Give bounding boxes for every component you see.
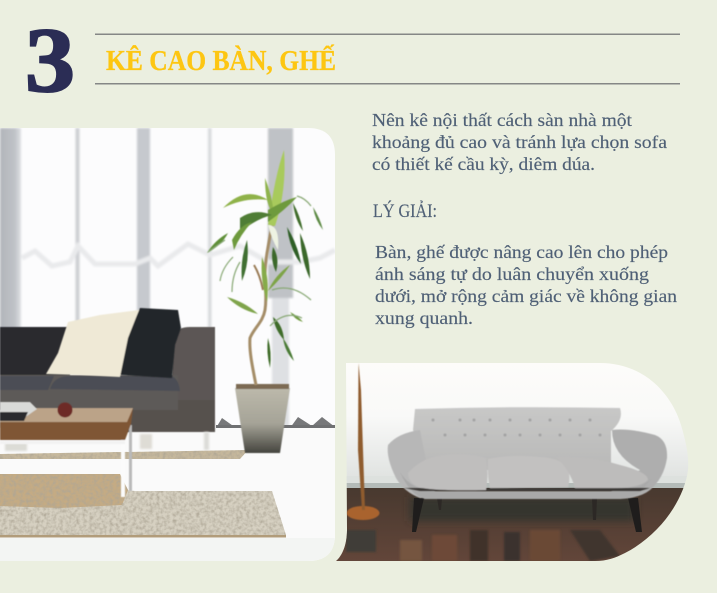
plant: [207, 150, 323, 385]
lamp: [346, 363, 380, 520]
sofa cushions: [404, 461, 650, 492]
text block: label: LÝ GIẢI:: [373, 200, 437, 222]
skirting: [346, 481, 686, 483]
heading: KÊ CAO BÀN, GHẾ: [106, 45, 336, 77]
text block: explanation: ánh sáng tự do luân chuyển xuống: [375, 264, 649, 284]
text block: recommendation: Nên kê nội thất cách sàn nhà một: [372, 110, 632, 130]
text block: explanation: xung quanh.: [375, 308, 473, 328]
floor: [330, 488, 700, 563]
step number: 3: [25, 9, 75, 111]
text block: recommendation: khoảng đủ cao và tránh lựa chọn sofa: [372, 132, 667, 152]
text block: explanation: [375, 242, 677, 328]
text block: recommendation: có thiết kế cầu kỳ, diêm dúa.: [372, 154, 595, 174]
back rug: [0, 450, 248, 459]
front rug: [0, 490, 286, 537]
sofa body: [388, 407, 667, 499]
curtains: [0, 128, 335, 428]
photo: grey sofa: [330, 363, 700, 563]
text block: recommendation: [372, 110, 667, 174]
plant pot: [235, 384, 290, 453]
pillows: [46, 308, 181, 378]
text block: explanation: Bàn, ghế được nâng cao lên cho phép: [375, 242, 668, 262]
coffee table: [0, 402, 133, 497]
sofa legs: [412, 498, 642, 532]
text block: explanation: dưới, mở rộng cảm giác về không gian: [375, 286, 677, 306]
sofa feet reflections: [5, 432, 209, 451]
photo: living room: [0, 128, 335, 561]
sofa tufting: [432, 418, 602, 436]
sofa: [0, 327, 215, 432]
floor: [284, 428, 288, 429]
